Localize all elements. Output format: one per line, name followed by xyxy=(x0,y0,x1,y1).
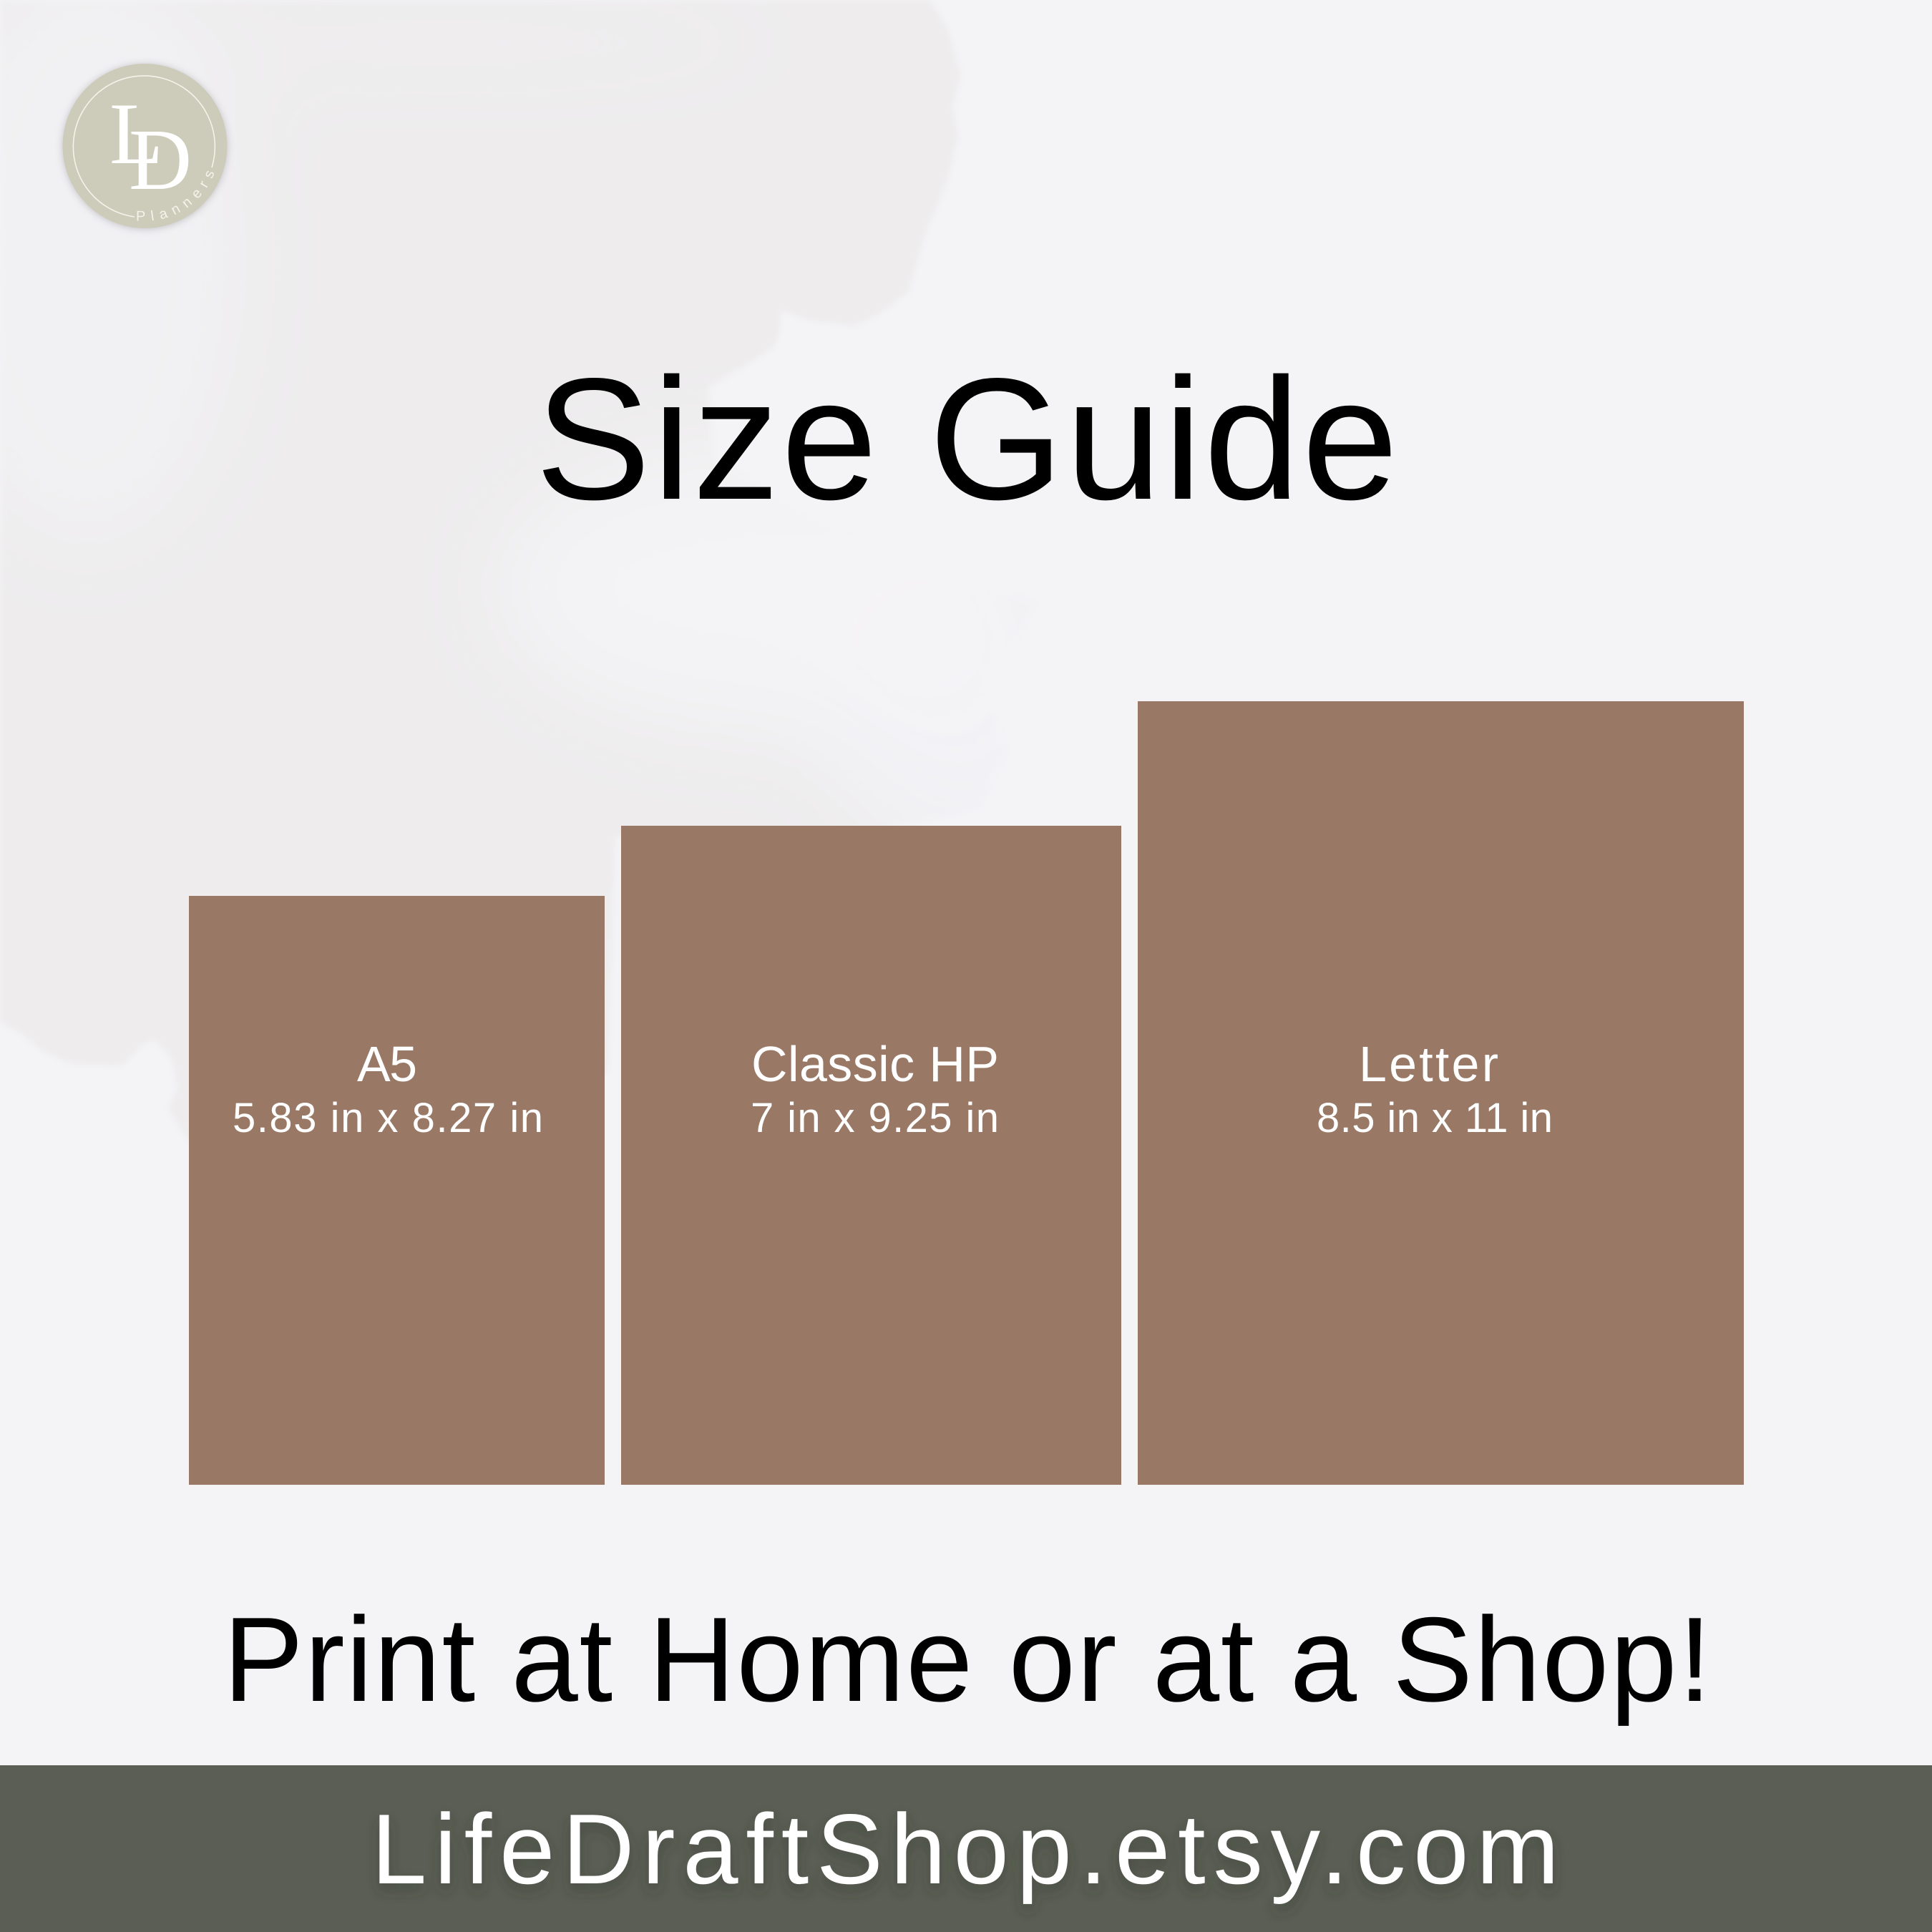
logo caption: Planners xyxy=(137,170,214,220)
print note: Print at Home or at a Shop! xyxy=(223,1592,1712,1727)
logo badge xyxy=(59,61,230,232)
Letter rectangle xyxy=(1138,701,1744,1485)
Classic HP dimensions: 7 in x 9.25 in xyxy=(751,1095,999,1141)
A5 name: A5 xyxy=(357,1036,417,1092)
logo circle xyxy=(63,64,228,228)
Classic HP rectangle xyxy=(621,826,1121,1485)
panel: Classic HP size xyxy=(621,826,1121,1485)
panel: Letter size xyxy=(1138,701,1744,1485)
logo letter L: L xyxy=(109,84,163,182)
panel: A5 size xyxy=(189,896,605,1485)
title: Size Guide xyxy=(535,343,1398,536)
Classic HP name: Classic HP xyxy=(751,1036,999,1092)
Letter dimensions: 8.5 in x 11 in xyxy=(1317,1095,1553,1141)
logo letter D: D xyxy=(129,112,192,208)
logo ring xyxy=(73,76,215,217)
footer background xyxy=(0,1765,1932,1932)
shop URL: LifeDraftShop.etsy.com xyxy=(371,1794,1559,1905)
Letter name: Letter xyxy=(1359,1036,1498,1092)
A5 dimensions: 5.83 in x 8.27 in xyxy=(233,1095,543,1141)
footer band xyxy=(0,1765,1932,1932)
A5 rectangle xyxy=(189,896,605,1485)
